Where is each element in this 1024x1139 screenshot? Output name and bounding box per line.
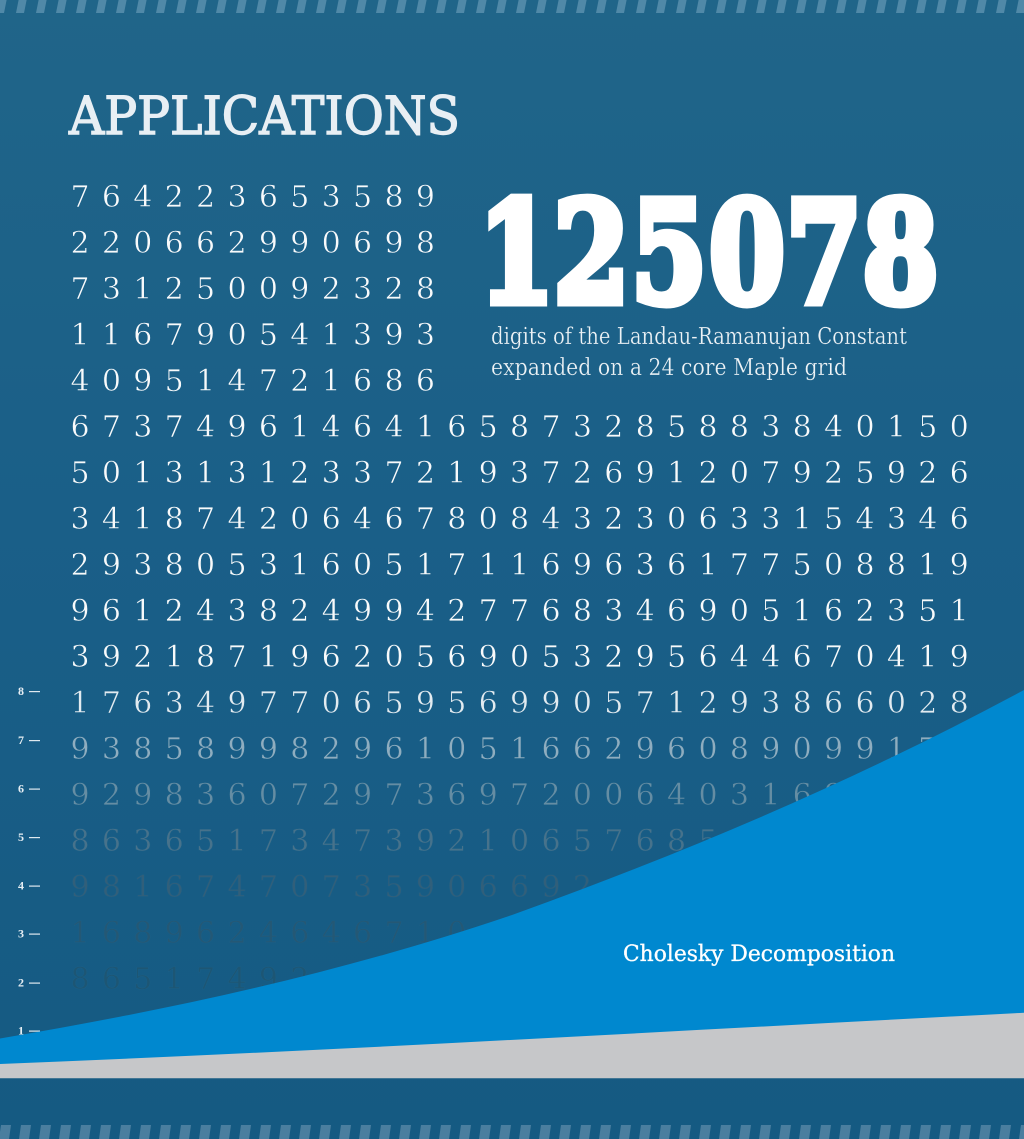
bottom stripe band bbox=[0, 1125, 1024, 1139]
caption: expanded on a 24 core Maple grid bbox=[491, 355, 847, 381]
caption: digits of the Landau-Ramanujan Constant bbox=[491, 324, 908, 350]
digit grid: 764223653589 bbox=[70, 180, 435, 215]
heading: applications: APPLICATIONS bbox=[68, 87, 460, 147]
digit grid: 50131312337219372691207925926 bbox=[70, 456, 969, 491]
digit grid: 86517492 bbox=[70, 962, 309, 997]
digit grid: 731250092328 bbox=[70, 272, 435, 307]
digit grid: 863651734739210657685 bbox=[70, 824, 718, 859]
digit grid: 92983607297369720064031698 bbox=[70, 778, 875, 813]
axis scale: 3 bbox=[18, 926, 24, 940]
axis scale: 1 bbox=[18, 1024, 24, 1038]
digit grid: 29380531605171169636177508819 bbox=[70, 548, 969, 583]
digit grid: 220662990698 bbox=[70, 226, 435, 261]
digit grid: 96124382499427768346905162351 bbox=[70, 594, 969, 629]
axis scale: 7 bbox=[18, 733, 24, 747]
axis scale: 6 bbox=[18, 782, 24, 796]
digit grid: 17634977065956990571293866028 bbox=[70, 686, 969, 721]
top stripe band bbox=[0, 0, 1024, 13]
digit grid: 409514721686 bbox=[70, 364, 435, 399]
big number: 125078 bbox=[479, 170, 939, 335]
digit grid: 1689624646710 bbox=[70, 916, 466, 951]
area label: Cholesky Decomposition bbox=[623, 942, 895, 967]
digit grid: 9385899829610516629608909917 bbox=[70, 732, 937, 767]
digit grid: 67374961464165873285883840150 bbox=[70, 410, 969, 445]
blue area: cholesky decomposition curve bbox=[0, 690, 1024, 1078]
digit grid: 98167470735906692 bbox=[70, 870, 592, 905]
axis scale: 4 bbox=[18, 878, 24, 892]
caption bbox=[491, 324, 908, 381]
digit grid: 34187420646780843230633154346 bbox=[70, 502, 969, 537]
grey area: lower curve bbox=[0, 1013, 1024, 1078]
axis scale bbox=[18, 684, 40, 1038]
axis scale: 5 bbox=[18, 830, 24, 844]
digit grid: 116790541393 bbox=[70, 318, 435, 353]
digit grid: 39218719620569053295644670419 bbox=[70, 640, 969, 675]
axis scale: 2 bbox=[18, 976, 24, 990]
digit grid bbox=[70, 180, 969, 997]
axis scale: 8 bbox=[18, 684, 24, 698]
